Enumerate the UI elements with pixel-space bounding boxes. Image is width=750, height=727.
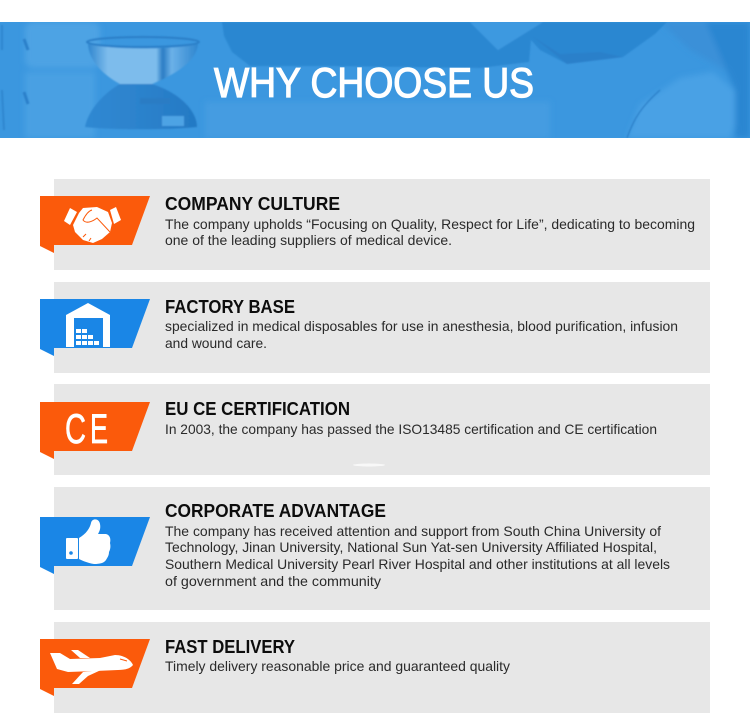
text block: specialized in medical disposables for use in anesthesia, blood purification, infusion xyxy=(165,318,678,334)
icon tag: CE mark: E xyxy=(90,405,108,452)
text block: The company has received attention and support from South China University of xyxy=(165,523,661,539)
text block: Timely delivery reasonable price and guaranteed quality xyxy=(165,658,510,674)
icon tag: warehouse xyxy=(40,299,150,356)
header banner xyxy=(0,22,750,138)
text block: of government and the community xyxy=(165,573,381,589)
icon tag: CE mark: C xyxy=(65,405,86,452)
title: WHY CHOOSE US xyxy=(214,59,534,106)
panel: fast delivery xyxy=(40,622,710,713)
icon tag: handshake xyxy=(40,196,150,253)
text block: one of the leading suppliers of medical device. xyxy=(165,232,452,248)
panel: factory base xyxy=(40,282,710,373)
heading: COMPANY CULTURE xyxy=(165,194,340,214)
text block: In 2003, the company has passed the ISO13485 certification and CE certification xyxy=(165,421,657,437)
heading: EU CE CERTIFICATION xyxy=(165,399,350,419)
text block xyxy=(165,216,695,248)
icon tag: thumbs up xyxy=(40,517,150,574)
text block: and wound care. xyxy=(165,335,267,351)
heading: FACTORY BASE xyxy=(165,297,295,317)
text block: The company upholds “Focusing on Quality, Respect for Life”, dedicating to becoming xyxy=(165,216,695,232)
icon tag: CE mark xyxy=(40,402,150,459)
heading: CORPORATE ADVANTAGE xyxy=(165,501,386,521)
text block xyxy=(165,523,670,589)
text block: Technology, Jinan University, National Sun Yat-sen University Affiliated Hospital, xyxy=(165,539,657,555)
text block: Southern Medical University Pearl River Hospital and other institutions at all levels xyxy=(165,556,670,572)
icon tag: airplane xyxy=(40,639,150,696)
panel: EU CE certification xyxy=(40,384,710,475)
heading: FAST DELIVERY xyxy=(165,637,295,657)
panel: corporate advantage xyxy=(40,487,710,610)
panel: company culture xyxy=(40,179,710,270)
text block xyxy=(165,318,678,351)
